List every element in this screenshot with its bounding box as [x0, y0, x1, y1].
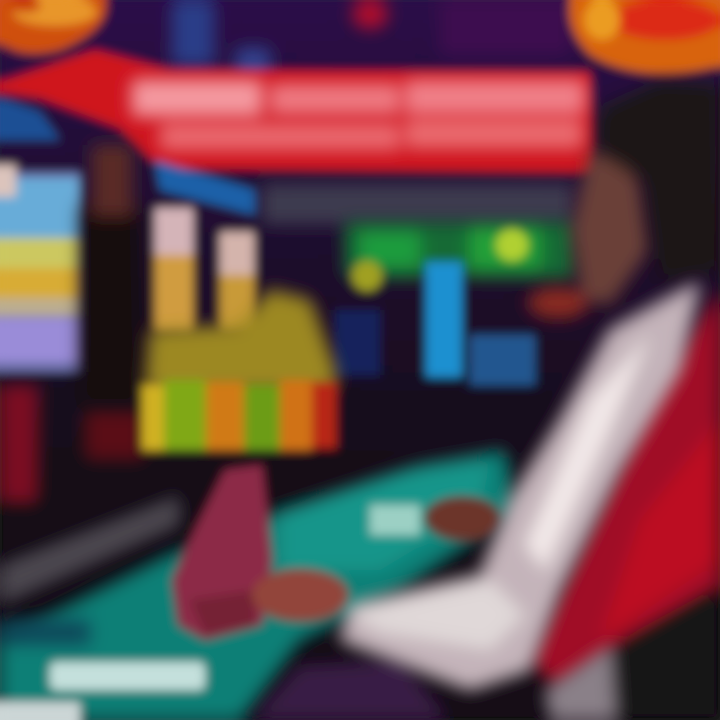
- table: teal surface: [0, 450, 515, 720]
- blue bars: [335, 262, 535, 385]
- crown: top left: [0, 0, 106, 54]
- left screen: rainbow panel: [0, 165, 80, 372]
- blue header over chart: [155, 160, 255, 215]
- bar chart: olive block: [145, 290, 335, 390]
- bar chart: tall bars: [155, 208, 254, 330]
- bar chart: colored columns: [142, 380, 336, 450]
- player: face: [528, 150, 648, 318]
- player: hand on table: [252, 496, 500, 621]
- blue strip left: [0, 98, 60, 140]
- bottom: dark purple table corner: [250, 660, 450, 720]
- banner: blurred headline: [132, 80, 585, 150]
- player: white shirt arm: [340, 280, 700, 690]
- bottom: white label pill: [0, 662, 205, 720]
- banner: red ribbon: [0, 50, 592, 172]
- top lights: [172, 0, 570, 78]
- grey band: [262, 184, 572, 224]
- player: red vest: [530, 290, 720, 690]
- bottom right shadow: [545, 590, 720, 720]
- green chart: [345, 222, 573, 278]
- dark pillar: [80, 145, 140, 405]
- table: dark edge: [0, 495, 180, 645]
- glass: mauve object: [172, 465, 272, 640]
- crown: top right: [569, 0, 720, 73]
- dark red lower left: [0, 385, 145, 503]
- player: hair: [598, 82, 720, 280]
- yellow lights: [352, 229, 528, 291]
